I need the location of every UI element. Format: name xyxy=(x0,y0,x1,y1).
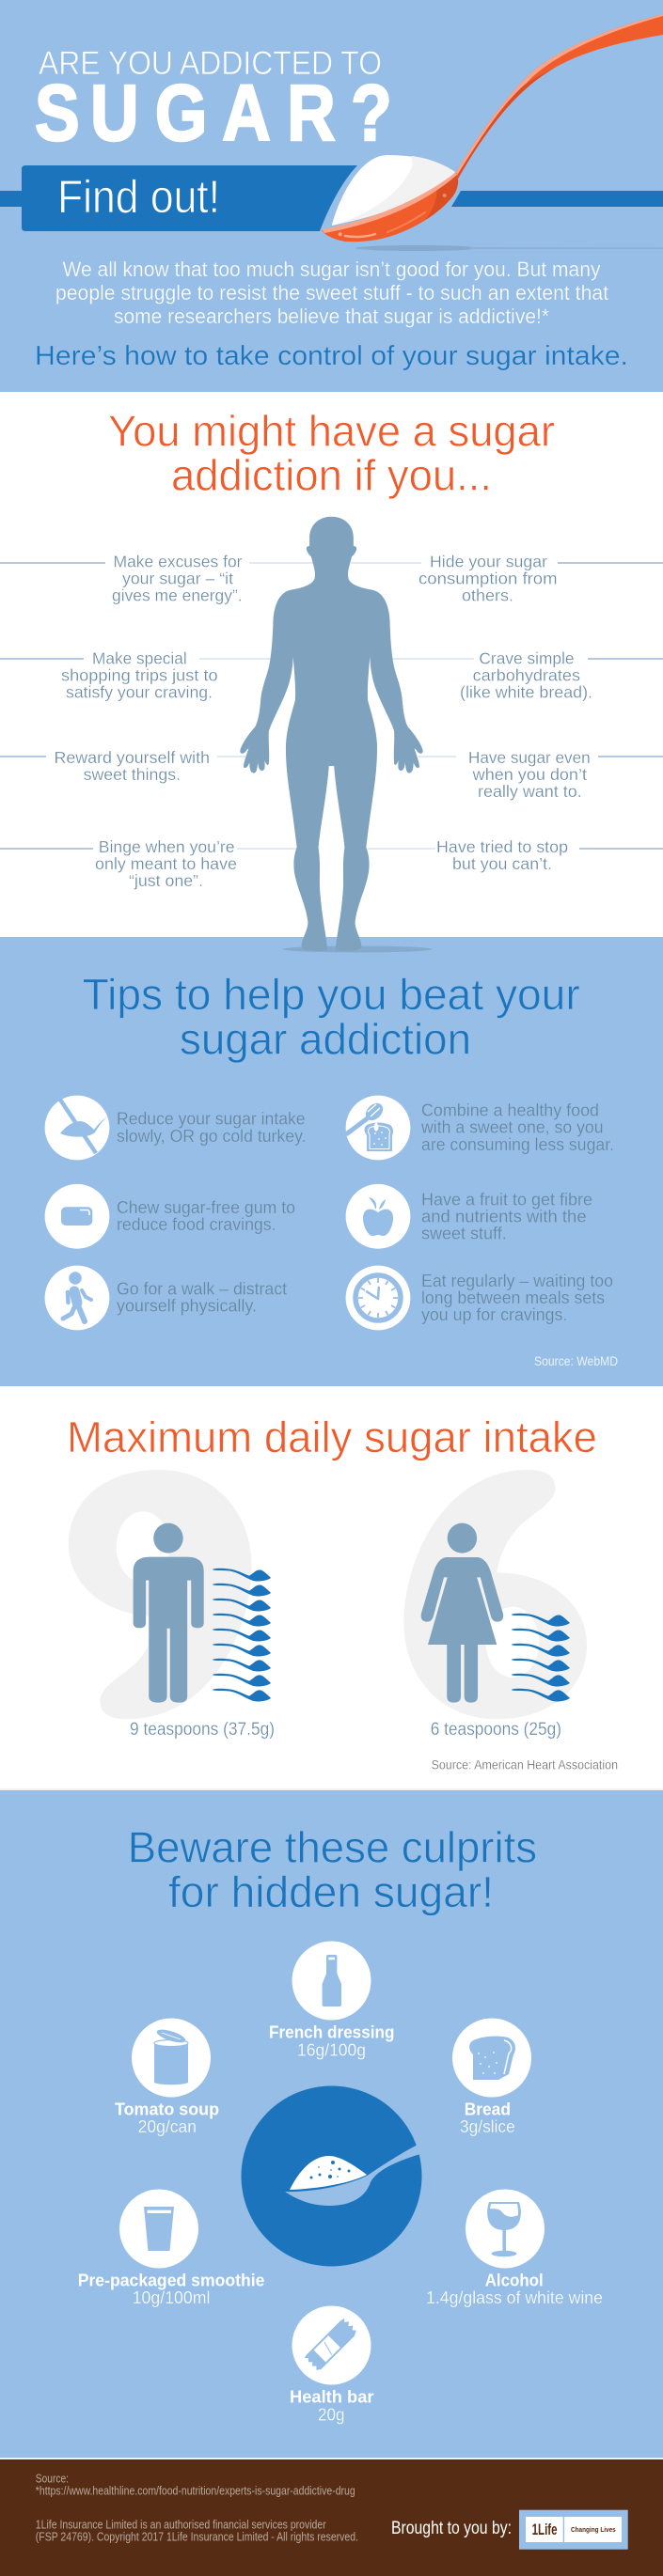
brought to you by: Brought to you by: xyxy=(391,2519,512,2538)
icon: central spoon xyxy=(241,2086,421,2267)
culprit: smoothie xyxy=(78,2190,265,2307)
tip: fruit: sweet stuff. xyxy=(421,1224,507,1242)
tip: gum: Chew sugar-free gum to xyxy=(117,1198,295,1217)
icon: spoon of sugar xyxy=(322,14,663,251)
banner: find out: Find out! xyxy=(57,172,220,223)
sign: binge: Binge when you’re xyxy=(99,837,235,856)
tip: reduce slowly: Reduce your sugar intake xyxy=(117,1110,306,1129)
heading: maximum: Maximum daily sugar intake xyxy=(67,1413,597,1461)
tip: eat regularly: you up for cravings. xyxy=(421,1305,567,1324)
sign: binge: only meant to have xyxy=(95,854,237,873)
culprit: health bar: 20g xyxy=(318,2405,344,2424)
heading: addiction: You might have a sugar xyxy=(108,406,555,455)
heading: addiction: addiction if you... xyxy=(171,451,492,500)
icon: man xyxy=(134,1523,204,1703)
culprit: bread: 3g/slice xyxy=(460,2117,515,2136)
sign: special trips: satisfy your craving. xyxy=(66,682,213,701)
culprit: bread: Bread xyxy=(465,2100,511,2119)
tip: gum: reduce food cravings. xyxy=(117,1215,276,1234)
tip: fruit: and nutrients with the xyxy=(421,1207,587,1226)
label: men: 9 teaspoons (37.5g) xyxy=(130,1720,275,1740)
intro text: We all know that too much sugar isn’t good for you. But many xyxy=(62,258,600,281)
title: are you addicted to: ARE YOU ADDICTED TO xyxy=(39,45,382,82)
sign: special trips: Make special xyxy=(92,648,187,667)
tip: eat regularly: long between meals sets xyxy=(421,1288,605,1307)
sign: reward yourself: sweet things. xyxy=(84,765,181,784)
intro text xyxy=(55,258,608,328)
tip: walk: yourself physically. xyxy=(117,1297,257,1316)
sign: crave carbs: carbohydrates xyxy=(473,665,580,684)
sign: make excuses xyxy=(112,553,243,605)
sign: binge xyxy=(95,837,237,890)
culprit: alcohol xyxy=(426,2190,603,2307)
sign: have sugar: really want to. xyxy=(478,782,582,801)
tip: fruit: Have a fruit to get fibre xyxy=(421,1190,592,1209)
sign: have sugar xyxy=(468,748,591,801)
intro text: some researchers believe that sugar is addictive!* xyxy=(114,304,549,328)
heading: tips: sugar addiction xyxy=(180,1015,471,1064)
sign: crave carbs: (like white bread). xyxy=(460,682,592,701)
culprit: bread xyxy=(452,2019,531,2136)
tip: walk: Go for a walk – distract xyxy=(117,1280,287,1299)
heading: culprits: for hidden sugar! xyxy=(168,1867,494,1916)
tip: combine food: Combine a healthy food xyxy=(421,1101,599,1120)
culprit: health bar: Health bar xyxy=(290,2388,374,2407)
culprit: tomato soup: Tomato soup xyxy=(115,2100,219,2119)
heading: tips: Tips to help you beat your xyxy=(83,970,580,1019)
numeral: nine xyxy=(69,1470,252,1719)
tip: walk xyxy=(45,1266,287,1330)
sign: binge: “just one”. xyxy=(129,871,203,890)
sign: hide consumption xyxy=(418,553,558,605)
subheading: Here’s how to take control of your sugar intake. xyxy=(35,341,628,371)
icon: six teaspoons xyxy=(512,1614,570,1701)
tip: eat regularly: Eat regularly – waiting too xyxy=(421,1272,613,1290)
culprit: french dressing xyxy=(269,1942,395,2059)
logo: 1life xyxy=(519,2510,628,2550)
sign: hide consumption: Hide your sugar xyxy=(430,553,547,571)
footer sources: *https://www.healthline.com/food-nutrition/experts-is-sugar-addictive-drug xyxy=(36,2485,355,2498)
tip: combine food: are consuming less sugar. xyxy=(421,1135,614,1154)
icon: nine teaspoons xyxy=(213,1569,271,1701)
sign: special trips: shopping trips just to xyxy=(61,665,218,684)
label: women: 6 teaspoons (25g) xyxy=(431,1720,561,1740)
sign: crave carbs xyxy=(460,648,592,701)
panel: footer xyxy=(0,2458,663,2576)
logo: 1life: Changing Lives xyxy=(571,2525,616,2534)
footer sources xyxy=(36,2473,355,2498)
tip: gum xyxy=(45,1184,295,1249)
tip: combine food xyxy=(346,1096,614,1160)
panel: addiction signs xyxy=(0,392,663,937)
culprit: smoothie: Pre-packaged smoothie xyxy=(78,2272,265,2290)
tip: reduce slowly: slowly, OR go cold turkey. xyxy=(117,1127,307,1146)
illustration: body silhouette xyxy=(240,517,432,953)
sign: reward yourself: Reward yourself with xyxy=(55,748,210,767)
culprit: alcohol: Alcohol xyxy=(485,2272,544,2290)
sign: tried to stop: but you can’t. xyxy=(452,854,552,873)
sign: hide consumption: others. xyxy=(462,586,513,605)
heading: culprits xyxy=(128,1823,537,1916)
sign: hide consumption: consumption from xyxy=(418,570,558,588)
tip: combine food: with a sweet one, so you xyxy=(420,1118,604,1137)
culprit: tomato soup: 20g/can xyxy=(138,2117,197,2136)
culprit: health bar xyxy=(290,2306,374,2424)
heading: addiction xyxy=(108,406,555,500)
logo: 1life: 1Life xyxy=(532,2521,558,2538)
panel: hero xyxy=(0,0,663,392)
culprit: tomato soup xyxy=(115,2019,219,2136)
tip: fruit xyxy=(346,1184,592,1249)
culprit: french dressing: 16g/100g xyxy=(297,2040,366,2059)
heading: culprits: Beware these culprits xyxy=(128,1823,537,1872)
source: webmd: Source: WebMD xyxy=(534,1353,618,1368)
numeral: six xyxy=(403,1470,587,1719)
footer legal: (FSP 24769). Copyright 2017 1Life Insurance Limited - All rights reserved. xyxy=(36,2531,358,2544)
footer legal xyxy=(36,2519,358,2544)
panel: maximum daily intake xyxy=(0,1386,663,1790)
footer legal: 1Life Insurance Limited is an authorised financial services provider xyxy=(36,2519,326,2532)
footer sources: Source: xyxy=(36,2473,69,2486)
sign: make excuses: gives me energy”. xyxy=(112,586,243,605)
culprit: french dressing: French dressing xyxy=(269,2022,395,2041)
sign: special trips xyxy=(61,648,218,701)
panel: tips xyxy=(0,937,663,1386)
sign: tried to stop xyxy=(436,837,568,873)
sign: have sugar: when you don’t xyxy=(472,765,587,784)
banner: find out xyxy=(0,165,663,231)
icon: woman xyxy=(421,1523,503,1703)
sign: crave carbs: Crave simple xyxy=(479,648,575,667)
culprit: smoothie: 10g/100ml xyxy=(133,2288,211,2307)
intro text: people struggle to resist the sweet stuff - to such an extent that xyxy=(55,281,608,304)
sign: make excuses: Make excuses for xyxy=(113,553,243,571)
sign: reward yourself xyxy=(55,748,210,784)
culprit: alcohol: 1.4g/glass of white wine xyxy=(426,2288,603,2307)
tip: eat regularly xyxy=(346,1266,613,1330)
sign: tried to stop: Have tried to stop xyxy=(436,837,568,856)
panel: hidden sugar xyxy=(0,1788,663,2458)
tip: reduce slowly xyxy=(45,1096,306,1160)
sign: have sugar: Have sugar even xyxy=(468,748,591,767)
title: sugar: SUGAR? xyxy=(35,68,392,157)
source: american heart association: Source: American Heart Association xyxy=(432,1757,618,1772)
sign: make excuses: your sugar – “it xyxy=(122,570,233,588)
heading: tips xyxy=(83,970,580,1064)
